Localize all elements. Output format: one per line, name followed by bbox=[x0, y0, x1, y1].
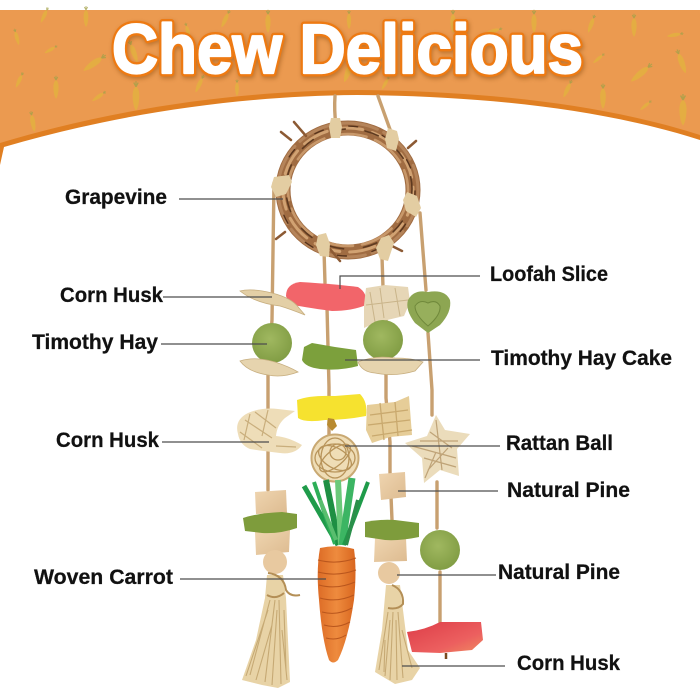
timothy hay cake bbox=[302, 343, 358, 370]
pine cube left bottom bbox=[255, 530, 290, 555]
corn husk strip top left bbox=[240, 290, 305, 315]
carrot leaves bbox=[304, 478, 368, 545]
tassel left bbox=[242, 573, 300, 688]
rattan ball bbox=[312, 434, 358, 482]
woven husk crescent bbox=[237, 408, 302, 453]
label: Grapevine: Grapevine bbox=[65, 186, 167, 209]
label: Timothy Hay Cake: Timothy Hay Cake bbox=[491, 347, 672, 370]
green ball left bbox=[252, 323, 292, 363]
pine cube left top bbox=[255, 490, 287, 514]
label: Rattan Ball: Rattan Ball bbox=[506, 432, 613, 455]
label: Natural Pine upper: Natural Pine bbox=[507, 479, 630, 502]
husk disc left bbox=[240, 359, 298, 376]
title: Chew Delicious bbox=[112, 10, 583, 88]
carrot pattern bbox=[13, 6, 688, 132]
heart cake bbox=[407, 291, 450, 333]
red loofah slice bbox=[286, 282, 366, 311]
title: Chew Delicious bbox=[112, 10, 583, 88]
grapevine wreath bbox=[271, 118, 421, 261]
label: Woven Carrot: Woven Carrot bbox=[34, 566, 173, 589]
label: Corn Husk upper left: Corn Husk bbox=[60, 284, 163, 307]
wooden bead right bbox=[378, 562, 400, 584]
green cake right bbox=[365, 520, 419, 540]
woven star bbox=[405, 415, 470, 483]
hanging toy bbox=[237, 96, 483, 688]
woven carrot bbox=[318, 546, 356, 662]
husk square top bbox=[364, 285, 410, 328]
pine cube right bottom bbox=[374, 538, 407, 562]
woven husk square bbox=[366, 396, 412, 443]
green ball right bbox=[420, 530, 460, 570]
tassel right bbox=[375, 585, 420, 684]
label: Corn Husk bottom right: Corn Husk bbox=[517, 652, 620, 675]
label: Natural Pine lower: Natural Pine bbox=[498, 561, 620, 584]
banner bbox=[0, 6, 700, 165]
twine knot bbox=[327, 418, 337, 431]
label: Timothy Hay: Timothy Hay bbox=[32, 331, 158, 354]
pine cube right top bbox=[379, 472, 406, 500]
red slab bottom bbox=[407, 622, 483, 659]
wooden bead left bbox=[263, 550, 287, 574]
green cake left bbox=[243, 512, 297, 533]
yellow loofah bbox=[297, 394, 366, 421]
husk disc right bbox=[358, 357, 423, 375]
label: Loofah Slice bbox=[340, 263, 608, 289]
green ball centre bbox=[363, 320, 403, 360]
twine strings bbox=[268, 96, 440, 622]
label: Corn Husk lower left: Corn Husk bbox=[56, 429, 159, 452]
label: Loofah Slice: Loofah Slice bbox=[490, 263, 608, 286]
